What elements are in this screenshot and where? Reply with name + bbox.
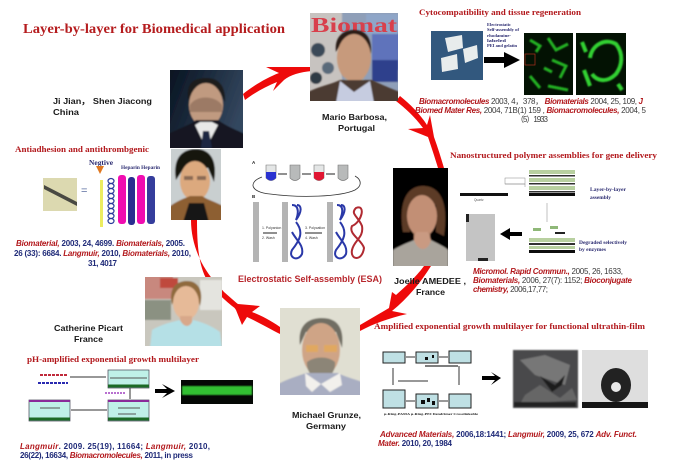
arrow [482, 372, 501, 385]
portrait: Barbosa figure [308, 30, 400, 103]
references: 26(22), 16634, Biomacromolecules, 2011, in press [20, 451, 194, 460]
circular red arrows [191, 67, 444, 334]
references: Langmuir. 2009. 25(19), 11664; Langmuir, 2010, [20, 442, 210, 451]
label: layer-by-layer assembly: assembly [590, 196, 612, 201]
references: Biomaterial, 2003, 24, 4699. Biomaterials, 2005. [16, 239, 185, 248]
step labels: 2. Wash [262, 236, 275, 240]
label: layer-by-layer assembly [590, 188, 627, 201]
panel: gene delivery [450, 150, 658, 294]
label: Joelle Amedee, France: Joelle AMEDEE , [394, 276, 466, 286]
caption: labeled [487, 38, 507, 43]
label A: A [252, 160, 256, 165]
references: Biomaterials, 2006, 27(7): 1152; Bioconjugate [473, 276, 633, 285]
panel: pH-amplified growth [20, 354, 253, 460]
water droplet [582, 350, 648, 408]
diagram: multilayer [100, 175, 155, 227]
label: Joelle Amedee, France [394, 276, 466, 297]
photo: Mario Barbosa with Biomat cover [308, 11, 400, 103]
arrow down [546, 203, 548, 222]
quartz substrate [460, 193, 508, 202]
references [14, 239, 191, 268]
process diagram [29, 370, 149, 421]
label: degraded: Degraded selectively [579, 241, 628, 246]
label: Catherine Picart, France: Catherine Picart [54, 323, 123, 333]
heading: Nanostructured polymer assemblies for gene delivery [450, 150, 658, 160]
label: heparin: Heparin Heparin [121, 165, 160, 171]
caption [487, 22, 520, 48]
photo: Ji Jian [168, 68, 245, 150]
label: Michael Grunze, Germany: Michael Grunze, [292, 410, 361, 420]
panel: electrostatic self-assembly diagram [252, 160, 364, 262]
heading: Antiadhesion and antithrombgenic [15, 144, 149, 154]
caption: Electrostatic [487, 22, 511, 27]
image: sugar-like scaffolds [431, 31, 483, 80]
references [20, 442, 210, 460]
photo: Joelle Amedee [393, 168, 448, 266]
label: negative: Negtive [89, 159, 113, 167]
process diagram [383, 351, 471, 408]
arrow: Picart to Chen [191, 220, 240, 309]
heading: Amplified exponential growth multilayer for functional ultrathin-film [374, 321, 645, 331]
quartz substrate: Quartz [474, 198, 484, 202]
image: fluorescent cells 2 [576, 33, 626, 95]
label: Catherine Picart, France: France [74, 334, 103, 344]
arrow: Barbosa to Amedee [396, 96, 444, 168]
arrow left [500, 228, 522, 240]
step labels: 4. Wash [305, 236, 318, 240]
image: fluorescent cells 1 [524, 33, 573, 95]
label: Ji Jian, Shen Jiacong, China: China [53, 107, 79, 117]
step labels: 3. Polycation [305, 226, 325, 230]
TEM image [466, 214, 495, 261]
arrow: Ji Jian to Barbosa [243, 67, 312, 100]
layered film [529, 170, 575, 196]
caption: PEI and gelatin [487, 43, 517, 48]
label: degraded: by enzymes [579, 248, 606, 253]
photo: Chinese researcher [171, 149, 221, 220]
symbol: equals: = [81, 185, 87, 197]
heading: Cytocompatibility and tissue regeneration [419, 7, 581, 17]
arrow: Amedee to Grunze [360, 266, 431, 331]
step labels: 1. Polyanion [262, 226, 281, 230]
arrow [484, 52, 520, 68]
icon: orange arrow [96, 166, 104, 174]
beakers [253, 165, 360, 196]
references: Mater. 2010, 20, 1984 [378, 439, 453, 448]
label B: B [252, 194, 256, 199]
label: Mario Barbosa, Portugal: Portugal [338, 123, 375, 133]
panel: antiadhesion [14, 144, 191, 268]
references: Micromol. Rapid Commun., 2005, 26, 1633, [473, 267, 623, 276]
arrow [155, 384, 175, 398]
label: Michael Grunze, Germany: Germany [306, 421, 346, 431]
heading: pH-amplified exponential growth multilayer [27, 354, 199, 364]
SEM image [513, 350, 578, 408]
fluorescence image [181, 380, 253, 404]
label: Ji Jian, Shen Jiacong, China: Ji Jian， Shen Jiacong [53, 96, 152, 106]
references: 26 (33): 6684. Langmuir, 2010, Biomaterials, 2010, [14, 249, 191, 258]
panel: amplified exponential growth [374, 321, 648, 448]
references [415, 97, 647, 124]
label: Mario Barbosa, Portugal [322, 112, 387, 133]
references: （5）1933 [516, 115, 549, 124]
label: Michael Grunze, Germany [292, 410, 361, 431]
label: layer-by-layer assembly: Layer-by-layer [590, 188, 627, 193]
references: 31, 4017 [88, 259, 118, 268]
caption: ESA: Electrostatic Self-assembly (ESA) [238, 274, 382, 284]
label: degraded [579, 241, 628, 253]
substrate and polymer chains [253, 202, 364, 262]
arrow: Grunze to Picart [224, 292, 280, 334]
process box [505, 178, 525, 187]
step labels [262, 226, 325, 240]
photo: Catherine Picart [145, 277, 222, 346]
title: Layer-by-layer for Biomedical application [23, 22, 285, 37]
references: chemistry, 2006,17,77; [473, 285, 548, 294]
image: coated tube [43, 178, 77, 211]
panel: cytocompatibility [415, 7, 647, 124]
diagram legend: μ-Ring-PAMA μ-Ring-PEI Dendrimer Crosslinkable [384, 412, 479, 416]
degraded film [529, 226, 575, 253]
photo: Michael Grunze [278, 306, 362, 397]
references [473, 267, 633, 294]
label: Biomat cover text: Biomat [311, 13, 397, 37]
caption: rhodamine- [487, 33, 512, 38]
caption: Self-assembly of [487, 27, 520, 32]
references: Biomacromolecules 2003, 4，378， Biomaterials 2004, 25, 109, J [419, 97, 644, 106]
label: Ji Jian, Shen Jiacong, China [53, 96, 152, 117]
references: Biomed Mater Res, 2004, 71B(1) 159 , Biomacromolecules, 2004, 5 [415, 106, 647, 115]
label: Catherine Picart, France [54, 323, 123, 344]
references [378, 430, 637, 448]
label: Mario Barbosa, Portugal: Mario Barbosa, [322, 112, 387, 122]
label: Joelle Amedee, France: France [416, 287, 445, 297]
references: Advanced Materials, 2006,18:1441; Langmuir, 2009, 25, 672 Adv. Funct. [379, 430, 637, 439]
